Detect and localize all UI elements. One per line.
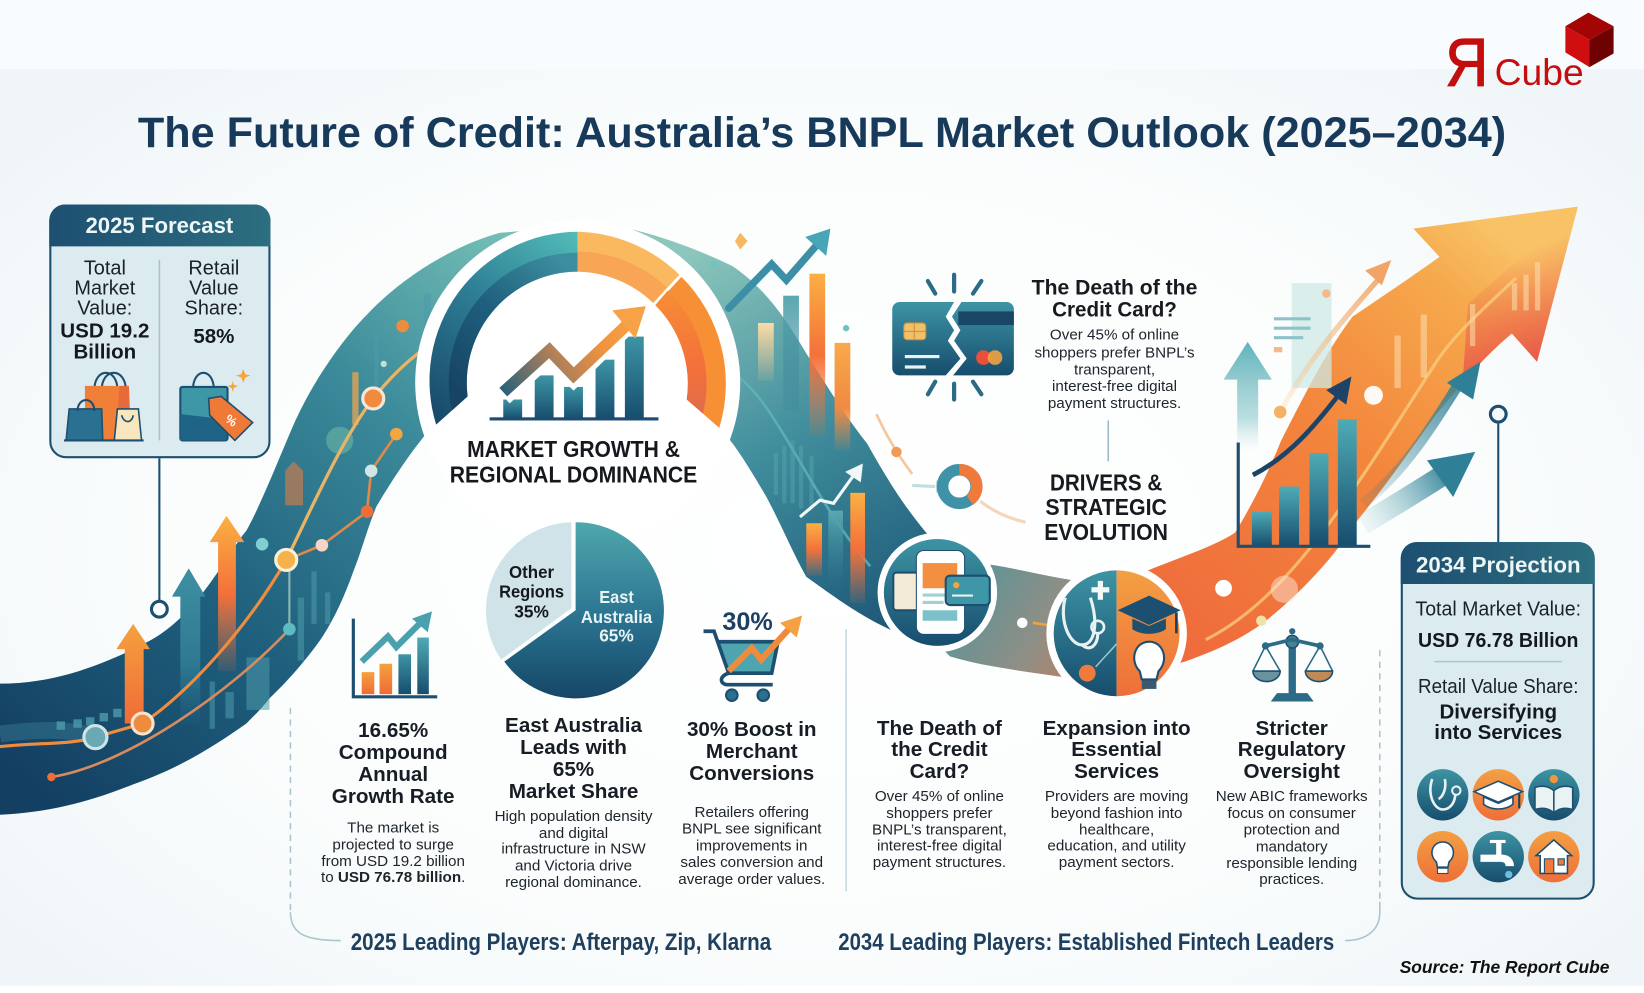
- text block: death of the credit card: shoppers prefer: [886, 805, 993, 822]
- heading: market growth and regional dominance: [450, 436, 697, 487]
- bar chart: rising projection: [1238, 376, 1370, 546]
- icon: market growth bar chart: [490, 306, 658, 420]
- text block: expansion into essential services: [1043, 717, 1191, 871]
- text block: east australia leads: [495, 714, 653, 891]
- text block: death of the credit card: BNPL’s transparent,: [872, 822, 1007, 839]
- stat: total market value: [1415, 599, 1581, 652]
- stat: total market value: Market: [74, 278, 136, 300]
- text block: compound annual growth rate: Compound: [339, 741, 448, 764]
- text block: the death of the credit card callout: interest-free digital: [1052, 378, 1177, 395]
- text block: east australia leads: East Australia: [505, 714, 642, 737]
- text block: the death of the credit card callout: payment structures.: [1048, 395, 1181, 412]
- text block: stricter regulatory oversight: New ABIC frameworks: [1216, 788, 1368, 805]
- pie chart: regional share: Regions: [499, 582, 564, 602]
- text block: the death of the credit card callout: [1032, 276, 1197, 412]
- icon: cart with growth arrow: 30%: [722, 608, 773, 636]
- growth ribbon: valley section: [923, 564, 1111, 682]
- text block: stricter regulatory oversight: Regulatory: [1238, 738, 1346, 761]
- stat: total market value: USD 19.2: [60, 320, 149, 343]
- footer: 2025 leading players: 2025 Leading Players: Afterpay, Zip, Klarna: [351, 929, 772, 956]
- icon: broken credit card: [892, 275, 1014, 400]
- text block: the death of the credit card callout: shoppers prefer BNPL’s: [1034, 345, 1195, 362]
- text block: stricter regulatory oversight: Oversight: [1244, 760, 1340, 783]
- text block: the death of the credit card callout: transparent,: [1074, 361, 1155, 378]
- arrow: teal right arrow: [1363, 452, 1475, 524]
- text block: expansion into essential services: healthcare,: [1079, 822, 1154, 839]
- text block: stricter regulatory oversight: focus on consumer: [1228, 805, 1356, 822]
- stat: total market value: Total: [84, 258, 126, 280]
- pie chart: regional share: Australia: [581, 607, 653, 627]
- text block: the death of the credit card callout: Over 45% of online: [1050, 327, 1179, 344]
- text block: merchant conversions: average order values.: [678, 871, 825, 888]
- text block: east australia leads: regional dominance.: [505, 874, 642, 891]
- text block: expansion into essential services: education, and utility: [1047, 837, 1186, 854]
- icon: scales of justice: [1253, 628, 1333, 701]
- text block: the death of the credit card callout: Credit Card?: [1052, 298, 1177, 322]
- text block: merchant conversions: [678, 718, 825, 888]
- text block: east australia leads: infrastructure in NSW: [501, 841, 646, 858]
- stat: retail value share: Share:: [185, 298, 243, 320]
- text block: death of the credit card: Over 45% of online: [875, 788, 1004, 805]
- panel heading: 2034 projection: 2034 Projection: [1416, 553, 1581, 578]
- heading: drivers and strategic evolution: DRIVERS &: [1050, 470, 1162, 496]
- icon: house: [1528, 831, 1580, 882]
- gauge arc: [430, 232, 726, 428]
- text block: the death of the credit card callout: The Death of the: [1032, 276, 1197, 300]
- text block: merchant conversions: Retailers offering: [694, 804, 809, 821]
- text block: merchant conversions: Conversions: [689, 762, 814, 785]
- text block: merchant conversions: 30% Boost in: [687, 718, 817, 741]
- text block: east australia leads: 65%: [553, 758, 594, 781]
- icon: graduation cap: [1473, 769, 1524, 821]
- stat: retail value share: into Services: [1434, 721, 1562, 744]
- panel heading: 2025 forecast: 2025 Forecast: [85, 213, 234, 238]
- icon: small donut with flow line: [877, 414, 1025, 522]
- logo: RCube: Я: [1445, 25, 1488, 101]
- icon: bag with discount tag: [180, 369, 253, 440]
- heading: drivers and strategic evolution: [1044, 470, 1168, 545]
- trend lines and nodes on left ribbon: [0, 320, 446, 781]
- text block: compound annual growth rate: projected to surge: [332, 836, 454, 853]
- text block: compound annual growth rate: Growth Rate: [332, 785, 455, 808]
- text block: east australia leads: and Victoria drive: [515, 857, 632, 874]
- stat: retail value share: [1418, 676, 1578, 744]
- stat: total market value: Value:: [77, 298, 132, 320]
- arrow: pale peach curved arrow: [1274, 260, 1391, 418]
- stat: total market value: Total Market Value:: [1415, 599, 1581, 621]
- panel: 2025 forecast: [49, 204, 271, 457]
- icon: water tap: [1473, 831, 1524, 882]
- stat: total market value: [60, 258, 149, 364]
- text block: east australia leads: High population density: [495, 808, 653, 825]
- text block: expansion into essential services: Essential: [1071, 738, 1162, 761]
- stat: total market value: Billion: [73, 341, 136, 364]
- icon: phone and card circle: [878, 533, 997, 652]
- heading: market growth and regional dominance: MARKET GROWTH &: [467, 436, 680, 462]
- icon: open book: [1528, 769, 1580, 821]
- text block: stricter regulatory oversight: Stricter: [1256, 717, 1328, 740]
- growth ribbon: left rising section: [0, 226, 578, 815]
- stat: retail value share: Value: [189, 278, 239, 300]
- text block: merchant conversions: sales conversion and: [680, 854, 823, 871]
- text block: compound annual growth rate: Annual: [358, 763, 428, 786]
- text block: compound annual growth rate: to USD 76.78 billion.: [321, 869, 465, 886]
- text block: death of the credit card: interest-free digital: [877, 837, 1002, 854]
- text block: expansion into essential services: beyond fashion into: [1051, 805, 1182, 822]
- connector: forecast to ribbon: [152, 458, 167, 617]
- connector: projection to ribbon: [1490, 406, 1506, 543]
- stat: retail value share: Retail: [188, 258, 239, 280]
- heading: drivers and strategic evolution: STRATEGIC: [1045, 494, 1167, 520]
- stat: total market value: USD 76.78 Billion: [1418, 629, 1578, 652]
- text block: death of the credit card: payment structures.: [873, 854, 1006, 871]
- pie chart: regional share: East: [599, 587, 634, 607]
- icon: shopping bags: [64, 373, 144, 440]
- heading: market growth and regional dominance: REGIONAL DOMINANCE: [450, 461, 697, 487]
- growth arrows on left ribbon: [116, 516, 244, 724]
- icon: cart with growth arrow: [704, 608, 802, 701]
- text block: compound annual growth rate: [321, 719, 465, 886]
- text block: expansion into essential services: Services: [1074, 760, 1159, 783]
- icon: light bulb: [1417, 831, 1468, 882]
- source note: Source: The Report Cube: [1400, 957, 1609, 977]
- logo: RCube: Cube: [1495, 52, 1584, 93]
- icon: bag with discount tag: %: [223, 412, 240, 430]
- text block: east australia leads: Market Share: [509, 780, 638, 803]
- text block: east australia leads: and digital: [539, 825, 608, 842]
- icon: trend arrow above descending ribbon: [711, 229, 849, 331]
- icon: stethoscope: [1417, 769, 1468, 821]
- panel: 2034 projection: [1401, 542, 1595, 899]
- text block: merchant conversions: Merchant: [706, 740, 798, 763]
- text block: compound annual growth rate: 16.65%: [358, 719, 428, 742]
- text block: east australia leads: Leads with: [520, 736, 627, 759]
- text block: death of the credit card: the Credit: [891, 738, 988, 761]
- logo: RCube: [1445, 13, 1614, 101]
- stat: retail value share: [185, 258, 243, 348]
- growth ribbon: descending section: [633, 230, 944, 635]
- text block: stricter regulatory oversight: protection and: [1244, 822, 1340, 839]
- text block: stricter regulatory oversight: mandatory: [1256, 838, 1328, 855]
- bracket: bottom framing line: [290, 650, 1380, 941]
- pie chart: regional share: 65%: [599, 626, 634, 646]
- stat: retail value share: Diversifying: [1439, 700, 1557, 723]
- text block: merchant conversions: improvements in: [696, 837, 807, 854]
- growth ribbon: rising orange arrow: [1017, 207, 1578, 682]
- pie chart: regional share: 35%: [514, 602, 549, 622]
- text block: death of the credit card: The Death of: [877, 717, 1002, 740]
- text block: death of the credit card: Card?: [910, 760, 969, 783]
- icon: white trend arrow on ribbon: [800, 463, 863, 517]
- pie chart: regional share: [486, 522, 664, 698]
- text block: expansion into essential services: Expansion into: [1043, 717, 1191, 740]
- text block: compound annual growth rate: The market is: [347, 820, 440, 837]
- arrow: pale teal up arrow: [1224, 342, 1272, 451]
- arrow: teal upper arrow: [1363, 362, 1480, 503]
- text block: compound annual growth rate: from USD 19.2 billion: [321, 853, 465, 870]
- text block: stricter regulatory oversight: [1216, 717, 1368, 888]
- text block: merchant conversions: BNPL see significant: [682, 821, 822, 838]
- icon: growth chart: [353, 611, 437, 697]
- footer: 2034 leading players: 2034 Leading Players: Established Fintech Leaders: [838, 929, 1334, 956]
- pie chart: regional share: Other: [509, 562, 554, 582]
- stat: retail value share: 58%: [193, 325, 234, 348]
- text block: death of the credit card: [872, 717, 1007, 871]
- heading: drivers and strategic evolution: EVOLUTION: [1044, 519, 1168, 545]
- text block: expansion into essential services: payment sectors.: [1059, 854, 1174, 871]
- icon: faint tall backdrop bar with lines: [1274, 283, 1332, 388]
- text block: expansion into essential services: Providers are moving: [1045, 788, 1188, 805]
- stat: retail value share: Retail Value Share:: [1418, 676, 1578, 698]
- text block: stricter regulatory oversight: practices.: [1259, 871, 1324, 888]
- icon: essential services circle: [1046, 563, 1187, 704]
- white halo behind gauge: [415, 220, 740, 545]
- text block: stricter regulatory oversight: responsible lending: [1226, 855, 1357, 872]
- title: The Future of Credit: Australia’s BNPL Market Outlook (2025–2034): [138, 109, 1506, 157]
